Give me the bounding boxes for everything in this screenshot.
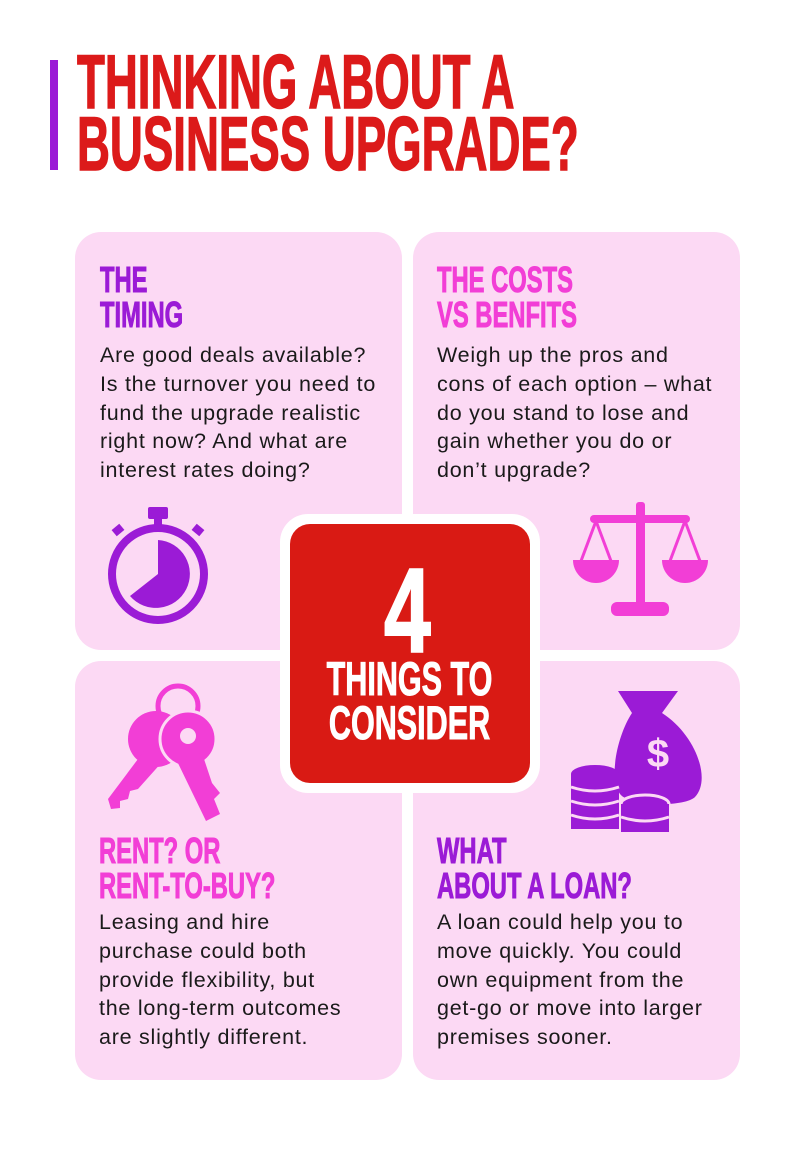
text: timing: right now? And what are	[100, 429, 348, 453]
heading: rent: RENT-TO-BUY?	[99, 865, 275, 906]
label: THINGS TO	[327, 652, 492, 705]
label	[326, 652, 492, 749]
text: loan: own equipment from the	[437, 968, 684, 992]
text: timing: interest rates doing?	[100, 458, 311, 482]
panel: timing	[75, 232, 402, 650]
panel: costs	[413, 232, 740, 650]
text: costs: do you stand to lose and	[437, 401, 689, 425]
heading: timing: TIMING	[100, 294, 183, 335]
text: rent: provide flexibility, but	[99, 968, 315, 992]
title: THINKING ABOUT A	[77, 40, 514, 125]
text: timing	[100, 343, 376, 482]
title	[77, 40, 579, 187]
icon: stopwatch	[108, 507, 208, 624]
heading: costs: VS BENFITS	[437, 294, 577, 335]
text: loan	[437, 910, 703, 1049]
heading: loan	[436, 830, 632, 906]
icon: scales	[573, 502, 708, 616]
title: BUSINESS UPGRADE?	[77, 102, 579, 187]
icon: money bag and coins	[571, 691, 702, 832]
text: rent: the long-term outcomes	[99, 996, 341, 1020]
text: rent: are slightly different.	[99, 1025, 308, 1049]
panel: rent	[75, 661, 402, 1080]
text: costs	[437, 343, 712, 482]
text: loan: get-go or move into larger	[437, 996, 703, 1020]
text: rent: purchase could both	[99, 939, 307, 963]
text: costs: cons of each option – what	[437, 372, 712, 396]
heading: costs: THE COSTS	[437, 259, 573, 300]
icon: money bag and coins: $	[647, 732, 669, 776]
text: loan: move quickly. You could	[437, 939, 682, 963]
text: costs: don’t upgrade?	[437, 458, 591, 482]
icon: keys	[108, 684, 220, 821]
heading: timing: THE	[100, 259, 148, 300]
text: loan: A loan could help you to	[437, 910, 683, 934]
text: loan: premises sooner.	[437, 1025, 613, 1049]
text: timing: Is the turnover you need to	[100, 372, 376, 396]
center badge	[280, 514, 540, 793]
heading: costs	[436, 259, 577, 335]
text: costs: Weigh up the pros and	[437, 343, 669, 367]
panel: loan	[413, 661, 740, 1080]
number 4: 4	[384, 544, 431, 678]
text: timing: fund the upgrade realistic	[100, 401, 361, 425]
label: CONSIDER	[329, 696, 490, 749]
heading: loan: WHAT	[437, 830, 506, 871]
title accent bar	[50, 60, 58, 170]
text: timing: Are good deals available?	[100, 343, 366, 367]
text: rent: Leasing and hire	[99, 910, 270, 934]
heading: loan: ABOUT A LOAN?	[437, 865, 632, 906]
text: costs: gain whether you do or	[437, 429, 672, 453]
heading: rent: RENT? OR	[99, 830, 220, 871]
heading: timing	[100, 259, 183, 335]
text: rent	[99, 910, 341, 1049]
heading: rent	[99, 830, 275, 906]
